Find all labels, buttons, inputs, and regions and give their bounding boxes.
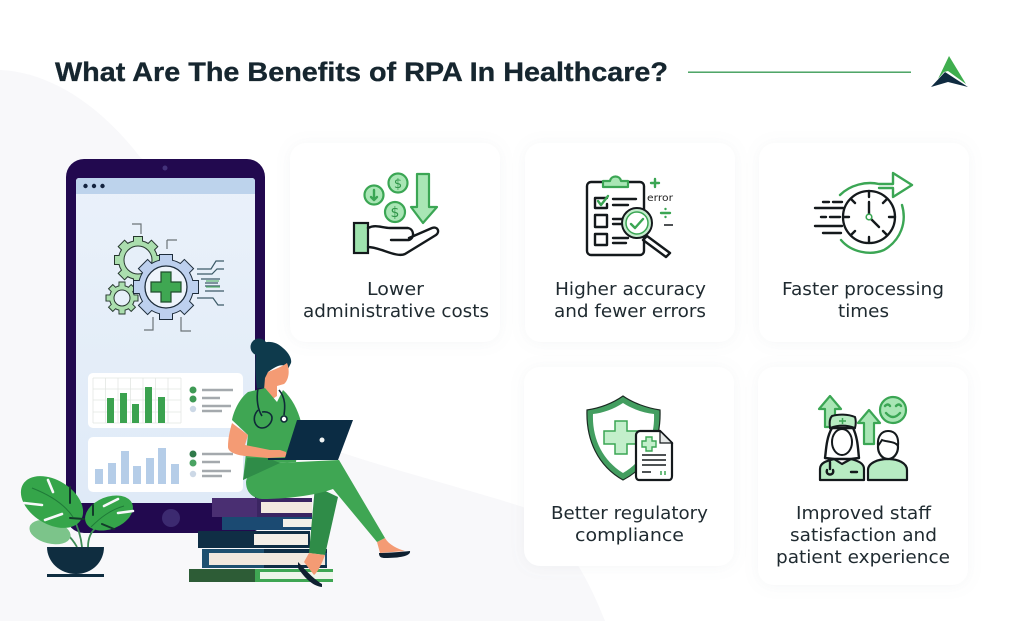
card: higher accuracy xyxy=(525,143,735,342)
gears automation graphic xyxy=(106,224,224,331)
bar chart: blue xyxy=(88,437,243,492)
card label: Better regulatory xyxy=(551,503,708,524)
small gear xyxy=(106,282,138,314)
logo xyxy=(931,56,968,87)
card: staff and patient experience xyxy=(758,367,968,585)
card label: compliance xyxy=(575,525,684,546)
laptop xyxy=(268,420,353,460)
card label: times xyxy=(838,301,889,322)
green gear xyxy=(114,236,162,284)
background swoosh xyxy=(0,70,605,621)
card label xyxy=(554,279,706,322)
face and neck xyxy=(264,363,289,402)
card: regulatory compliance xyxy=(524,367,734,566)
far foot and shoe xyxy=(377,538,410,558)
icon: hand and money xyxy=(354,174,438,255)
icon: hand and money: $ xyxy=(394,177,402,192)
icon: clipboard and magnifier xyxy=(587,176,674,257)
card label xyxy=(782,279,944,322)
icon: clipboard and magnifier: error xyxy=(647,193,674,204)
nurse with laptop xyxy=(228,338,410,587)
card label xyxy=(551,503,708,546)
card label xyxy=(776,503,950,568)
hair xyxy=(250,338,291,388)
title rule xyxy=(688,72,911,73)
tablet illustration xyxy=(66,159,265,533)
bar chart: green xyxy=(88,373,243,428)
arm xyxy=(228,423,287,458)
card label: satisfaction and xyxy=(790,525,937,546)
icon: shield and document xyxy=(587,396,672,480)
icon: hand and money: $ xyxy=(391,205,399,221)
title: What Are The Benefits of RPA In Healthcare? xyxy=(55,57,668,87)
card label: patient experience xyxy=(776,547,950,568)
card label: Improved staff xyxy=(796,503,932,524)
scrub top xyxy=(232,388,301,480)
screen header bar xyxy=(76,178,255,194)
potted plant xyxy=(12,465,138,577)
card label: Lower xyxy=(367,279,425,300)
card label: and fewer errors xyxy=(554,301,706,322)
card label: Faster processing xyxy=(782,279,944,300)
card: lower administrative costs xyxy=(290,143,500,342)
card label xyxy=(303,279,489,322)
stack of books xyxy=(189,498,333,582)
near foot and shoe xyxy=(298,553,325,587)
card label: Higher accuracy xyxy=(555,279,706,300)
icon: clock with arrow xyxy=(815,173,912,253)
trousers xyxy=(246,460,385,542)
stethoscope xyxy=(254,388,287,428)
main gear xyxy=(133,254,199,320)
card: faster processing xyxy=(759,143,969,342)
card label: administrative costs xyxy=(303,301,489,322)
home button xyxy=(162,509,180,527)
icon: staff and patient xyxy=(819,396,907,480)
lower back leg xyxy=(309,486,338,555)
